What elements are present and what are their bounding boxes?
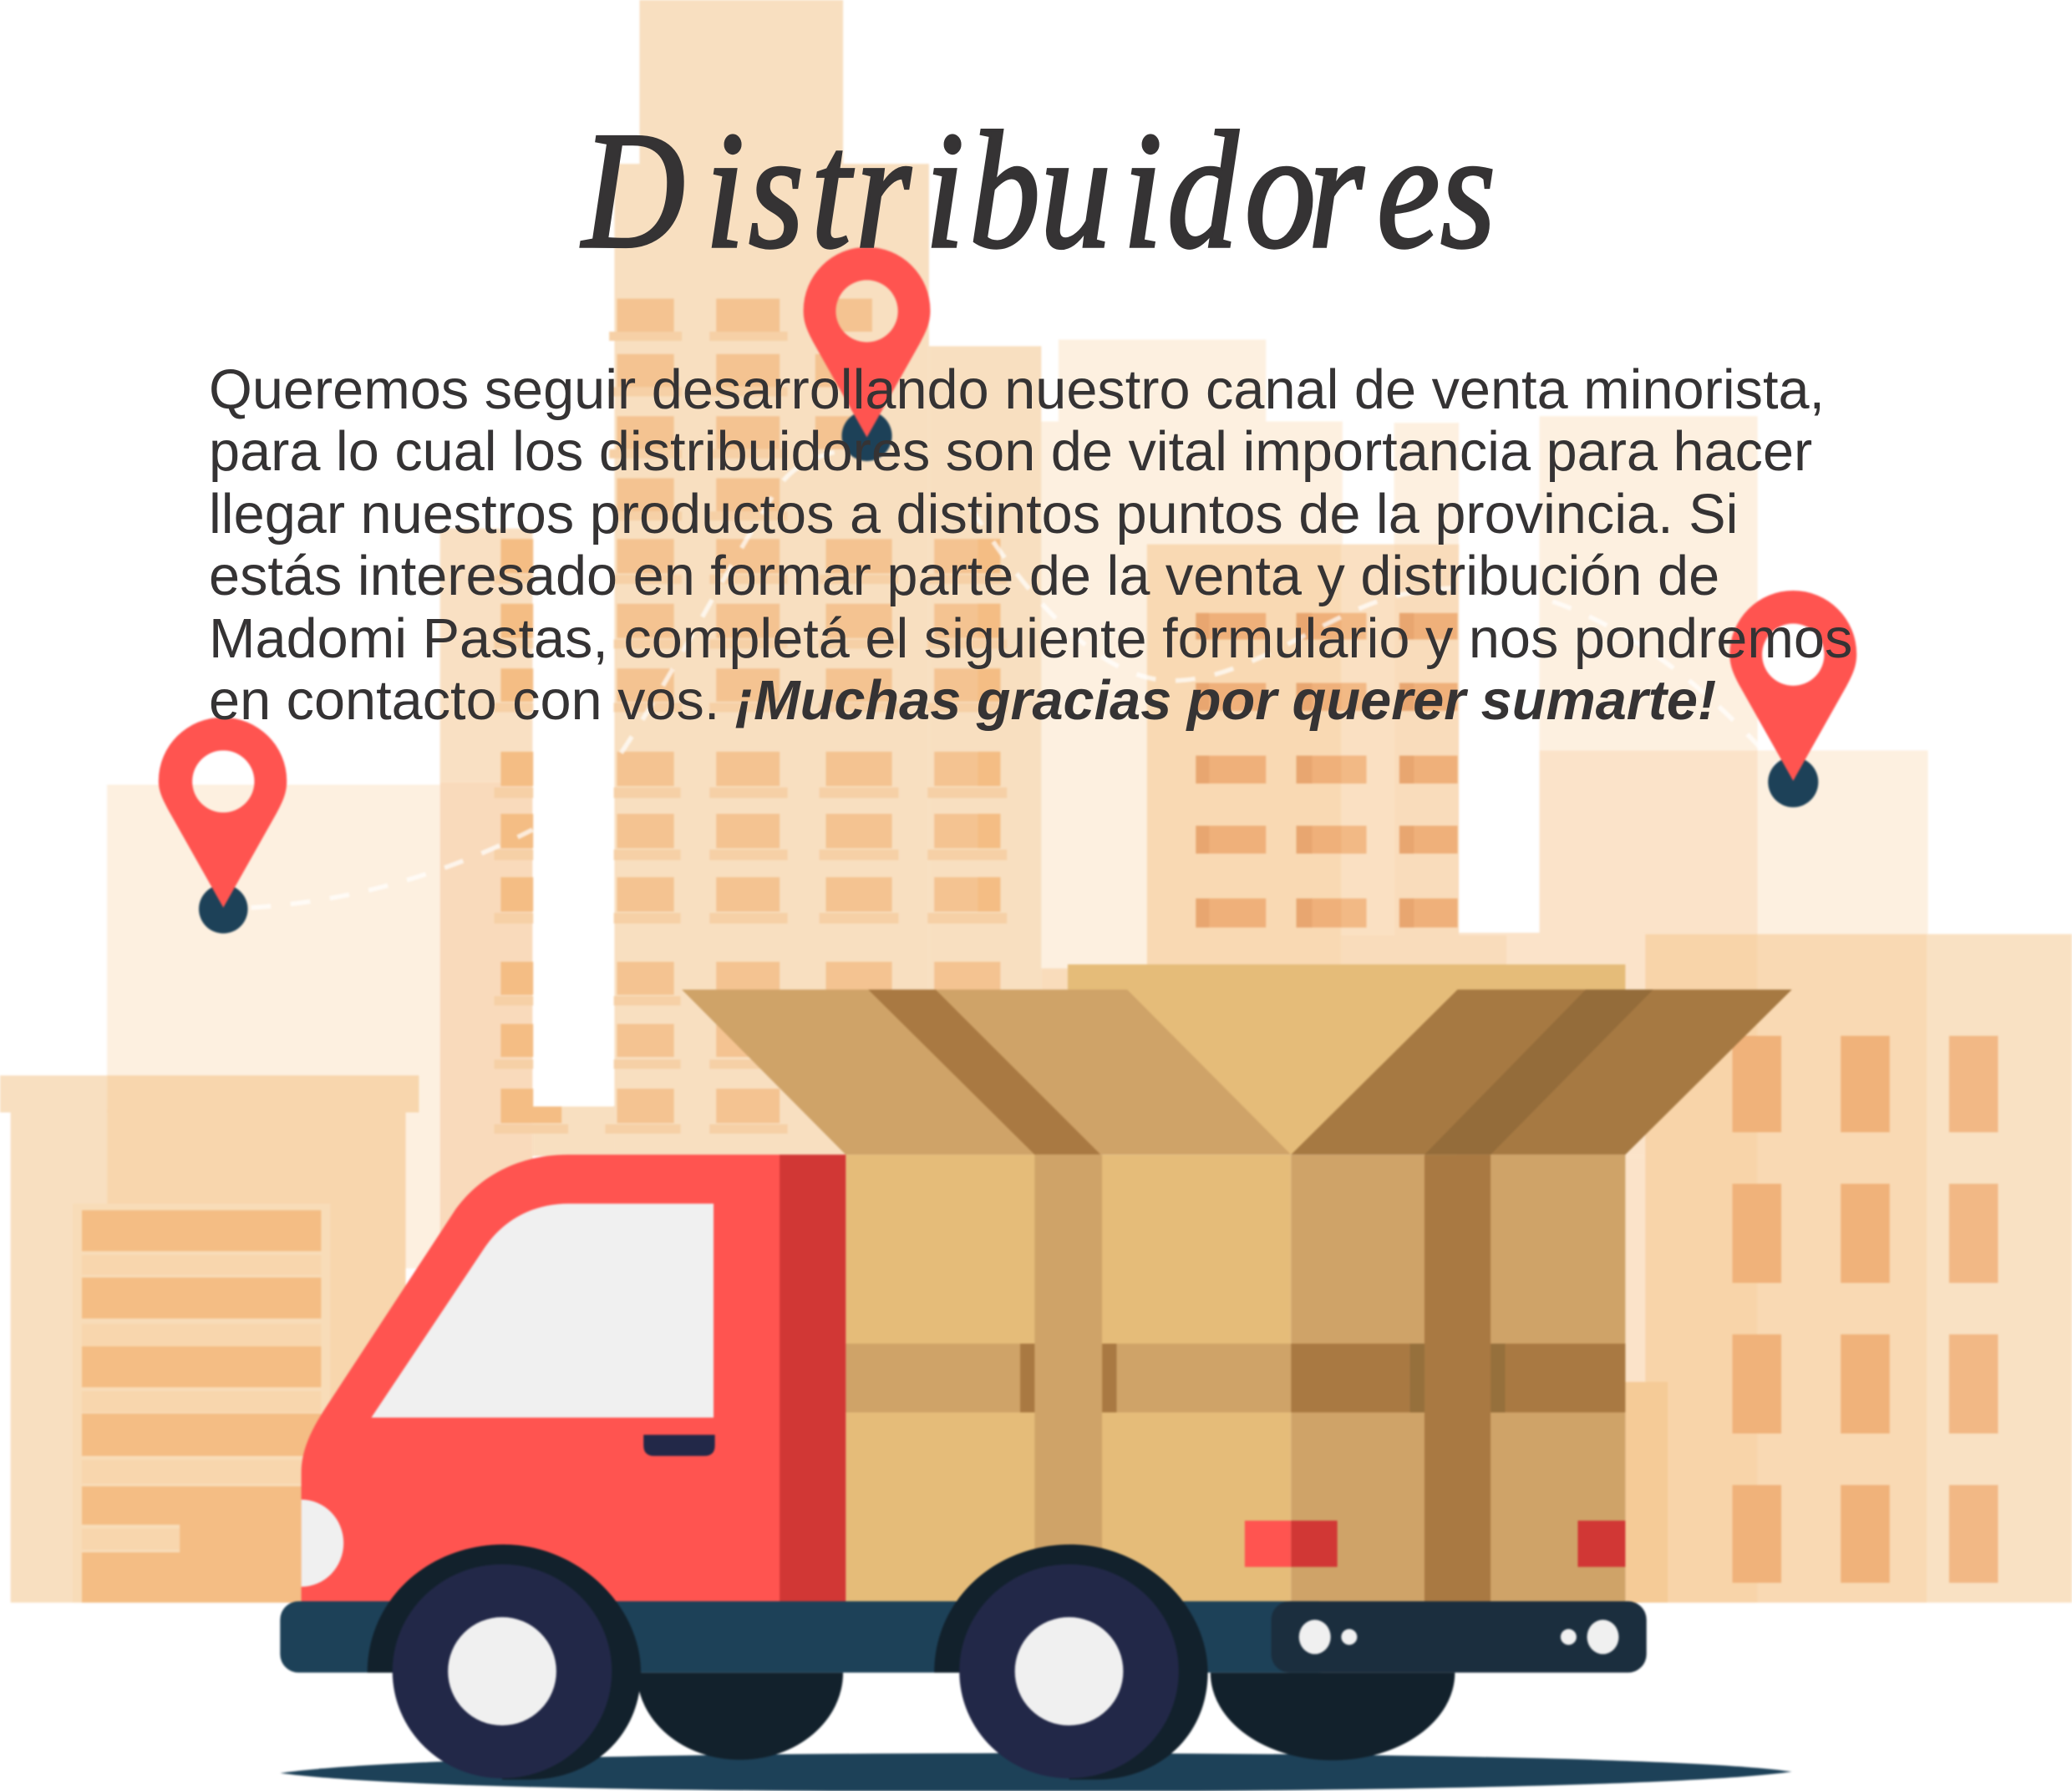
- text block: intro paragraph: estás interesado en formar parte de la venta y distribución de: [209, 545, 1719, 607]
- route: dashed paths between pins: [251, 449, 1777, 908]
- cab: [302, 1154, 846, 1604]
- text block: intro paragraph: para lo cual los distribuidores son de vital importancia para hacer: [209, 421, 1812, 483]
- text block: intro paragraph: Madomi Pastas, completá el siguiente formulario y nos pondremos: [209, 608, 1852, 670]
- ground shadow: [280, 1753, 1792, 1791]
- text block: intro paragraph: [209, 359, 1852, 732]
- front wheel: [368, 1545, 641, 1779]
- text block: intro paragraph: llegar nuestros productos a distintos puntos de la provincia. Si: [209, 484, 1738, 545]
- pin: left: [159, 718, 287, 933]
- title: Distribuidores: [580, 98, 1496, 283]
- delivery truck: [280, 965, 1792, 1791]
- cargo box: [682, 965, 1792, 1604]
- rear wheel: [934, 1545, 1208, 1779]
- rear bumper: [1272, 1601, 1647, 1672]
- rear hidden wheels: [637, 1672, 1455, 1760]
- chassis: [280, 1601, 1338, 1672]
- background: building windows: [73, 298, 1998, 1602]
- pin: right: [1729, 591, 1856, 807]
- text block: intro paragraph: en contacto con vos. ¡Muchas gracias por querer sumarte!: [209, 670, 1716, 732]
- text block: intro paragraph: Queremos seguir desarrollando nuestro canal de venta minorista,: [209, 359, 1825, 421]
- pin: centre: [804, 247, 930, 461]
